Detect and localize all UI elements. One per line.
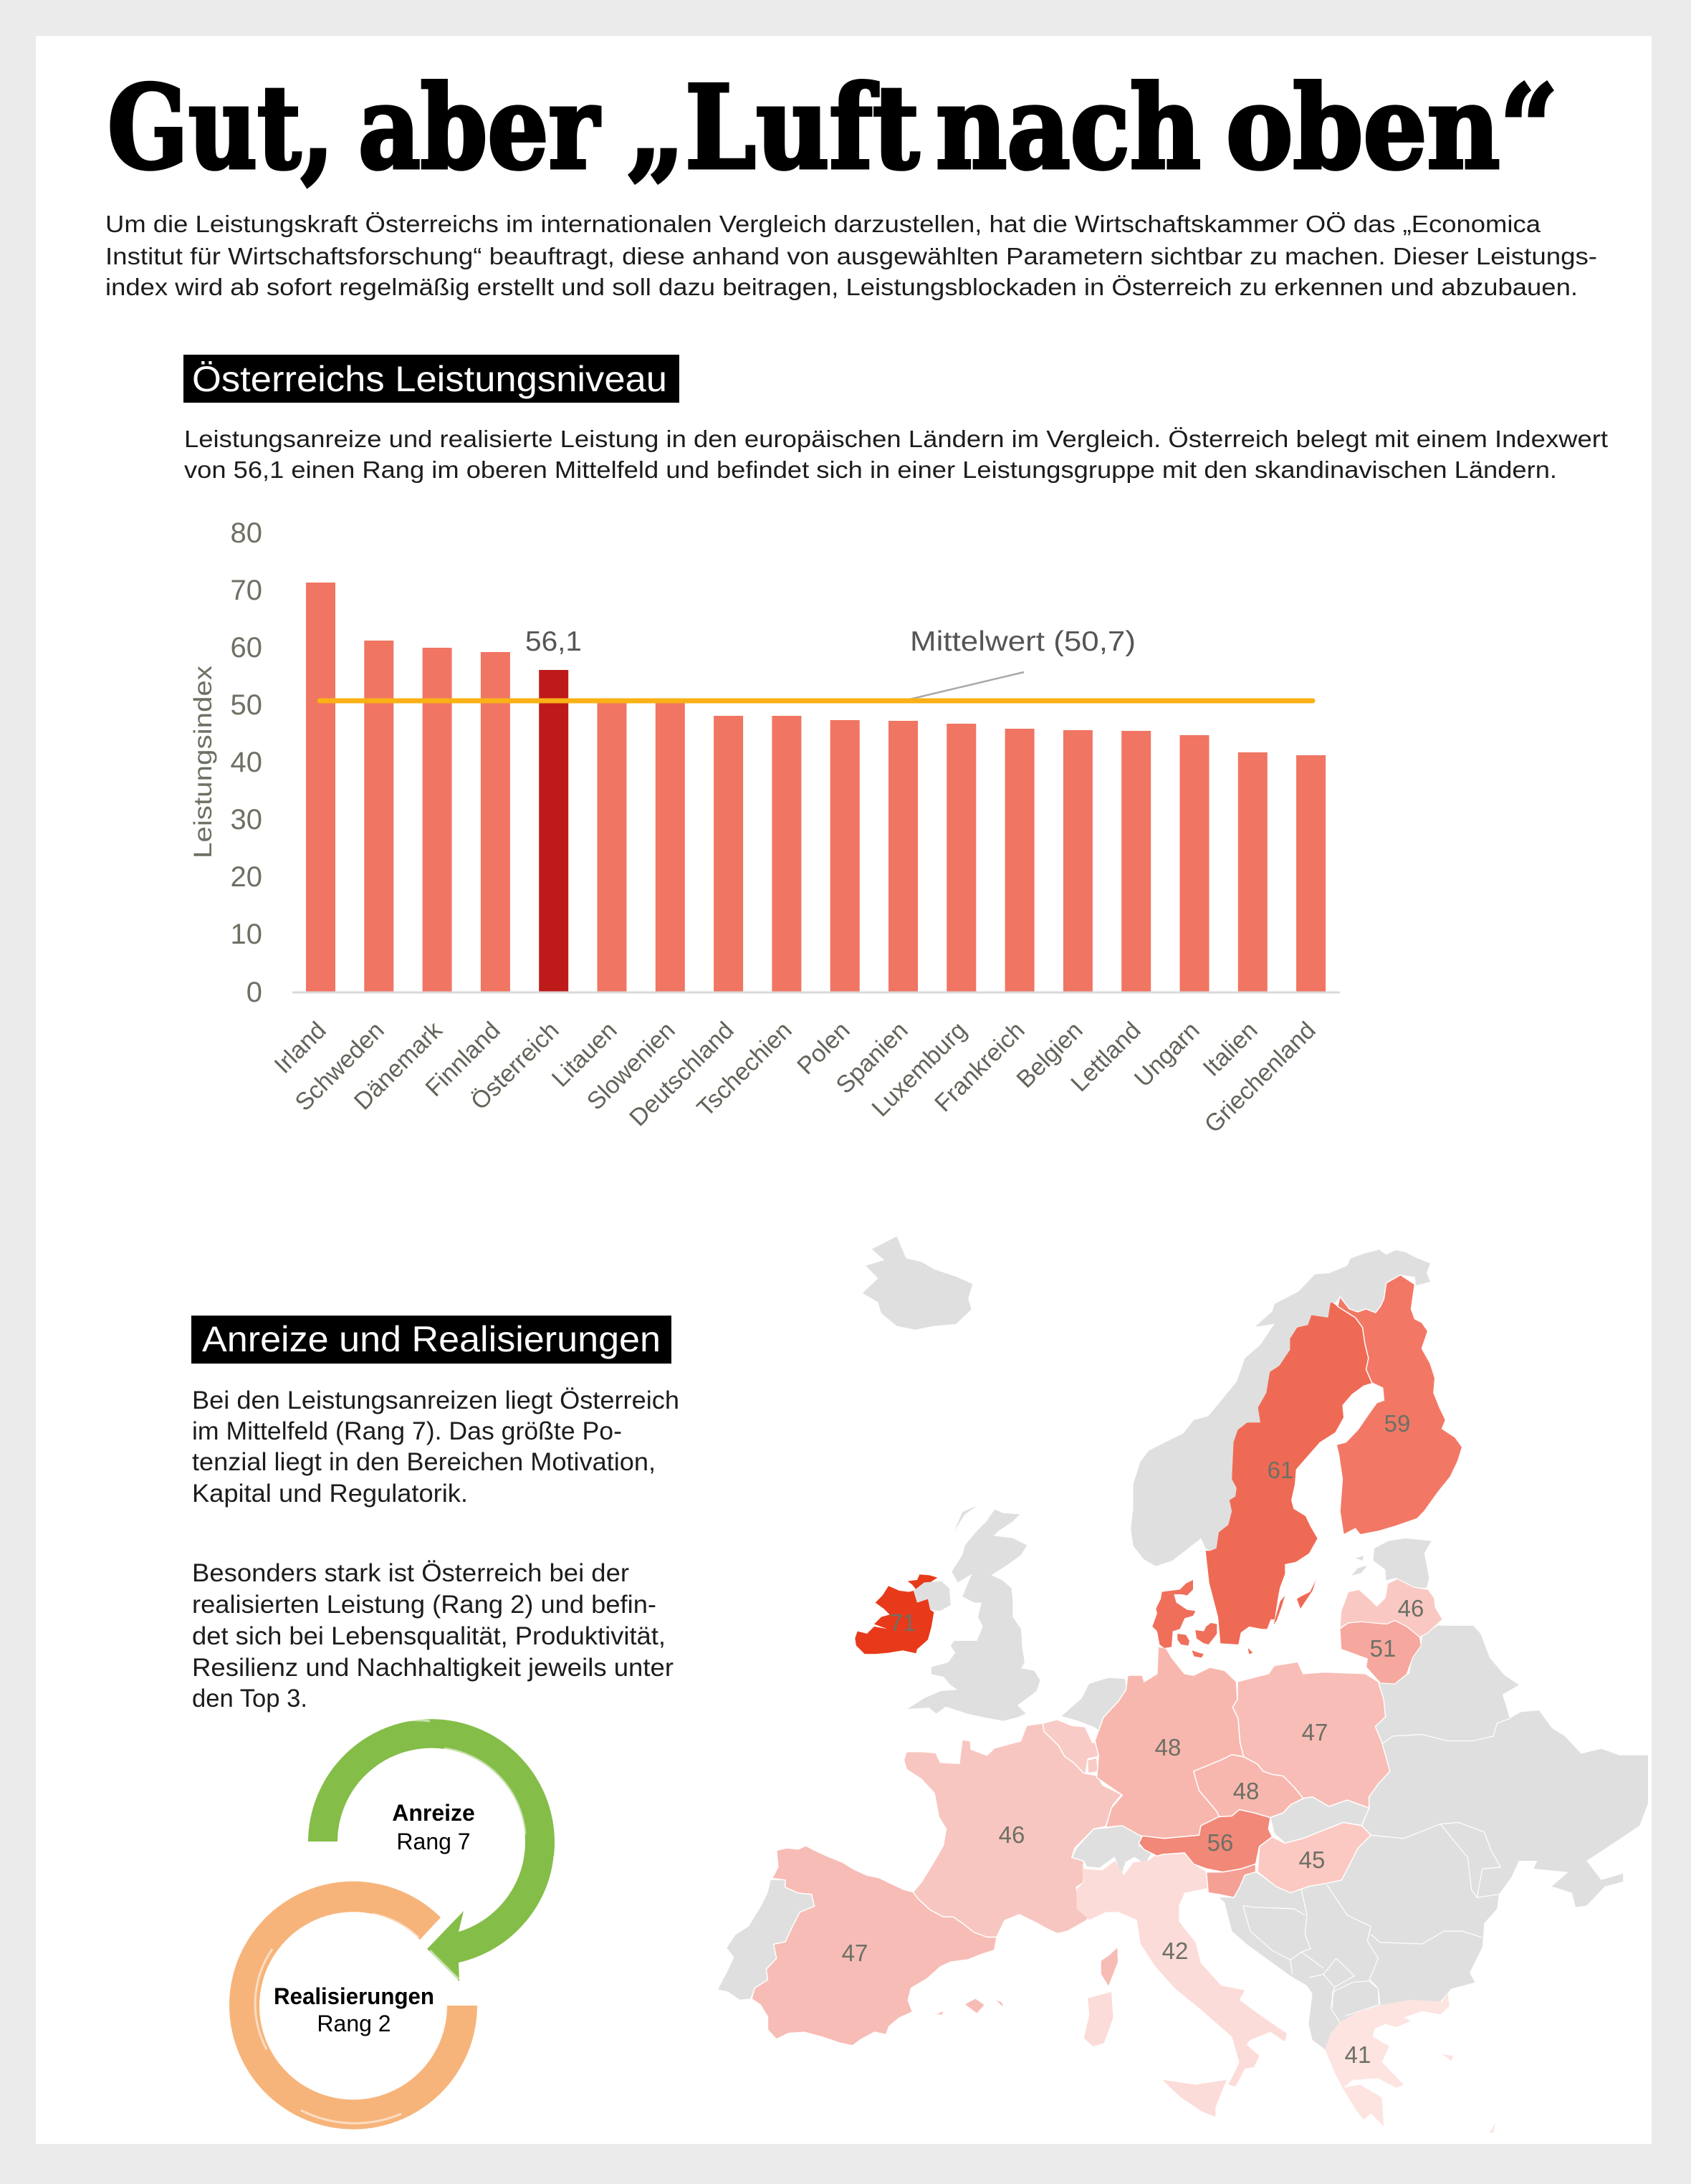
country labels: Dänemark [349,1016,448,1116]
text: realisierte Leistung: Resilienz und Nachhaltigkeit jeweils unter [192,1654,674,1682]
country labels: Frankreich [929,1017,1030,1117]
map value labels: 47 [842,1940,868,1966]
y axis tick labels: 60 [231,632,262,664]
southern Sweden [1207,1562,1316,1654]
Poland [1232,1662,1390,1808]
title: Gut, [107,60,334,195]
map value labels [842,1410,1424,2068]
Latvia [1340,1579,1442,1637]
country labels: Lettland [1065,1017,1146,1097]
Greece [1325,1993,1495,2132]
section text: Leistungsniveau: von 56,1 einen Rang im oberen Mittelfeld und befindet sich in einer Leistungsgruppe mit den skandinavischen Ländern. [184,456,1557,483]
Ireland [855,1574,937,1654]
y axis tick labels: 20 [231,861,262,893]
text: Leistungsanreize: im Mittelfeld (Rang 7). Das größte Po- [192,1417,622,1445]
map value labels: 61 [1268,1457,1293,1483]
map value labels: 45 [1299,1847,1325,1873]
Hungary [1258,1822,1371,1893]
y axis tick labels: 30 [231,804,262,835]
country labels: Spanien [831,1017,914,1099]
bars [306,583,1326,992]
label: Realisierungen: Realisierungen [274,1983,434,2009]
map value labels: 41 [1345,2041,1371,2068]
Scandinavia [1131,1250,1462,1619]
label: Anreize: Anreize [392,1800,475,1826]
France [904,1723,1121,1937]
title: oben“ [1226,60,1558,195]
mean line [320,698,1313,704]
Northern Ireland [914,1581,951,1611]
map value labels: 48 [1155,1734,1181,1761]
Slovenia [1207,1864,1256,1897]
text: Leistungsanreize: Kapital und Regulatorik. [192,1480,468,1508]
map value labels: 48 [1233,1778,1259,1804]
y axis tick labels: 0 [246,977,262,1008]
country labels: Österreich [466,1017,565,1116]
map value labels: 46 [1398,1595,1424,1622]
Norway [1131,1250,1430,1566]
y axis tick labels: 80 [231,517,262,549]
Sweden [1206,1303,1372,1619]
Czech Republic [1194,1755,1303,1818]
country labels: Luxemburg [867,1017,972,1122]
arrow: Anreize ring [308,1719,555,1981]
y axis tick labels: 50 [231,689,262,721]
British Isles and Netherlands [855,1506,1126,1732]
text: Leistungsanreize: Bei den Leistungsanreizen liegt Österreich [192,1386,679,1414]
map value labels: 56 [1207,1829,1233,1856]
label: mean value: Mittelwert (50,7) [910,626,1136,657]
country labels: Finnland [421,1017,506,1102]
country labels [269,1016,1321,1139]
map value labels: 46 [999,1821,1025,1848]
Belgium [1043,1720,1098,1773]
Austria [1139,1810,1273,1872]
country labels: Belgien [1012,1017,1088,1093]
heading: Österreichs Leistungsniveau: Österreichs Leistungsniveau [192,359,667,399]
country labels: Schweden [290,1017,390,1116]
United Kingdom [908,1506,1040,1721]
western countries [718,1720,1152,2046]
country labels: Irland [269,1017,332,1079]
country labels: Ungarn [1129,1017,1205,1093]
arrow: Realisierungen ring [229,1882,477,2130]
Iceland [863,1237,972,1330]
country labels: Slowenien [582,1017,681,1116]
y axis tick labels: 70 [231,575,262,606]
Germany [1095,1647,1244,1839]
Baltic and Danish area [1152,1562,1490,1684]
text: realisierte Leistung: den Top 3. [192,1685,307,1713]
text: realisierte Leistung: realisierten Leistung (Rang 2) und befin- [192,1591,656,1619]
Denmark [1152,1580,1217,1657]
bar chart [189,517,1340,1139]
central and eastern countries [1077,1626,1648,2132]
title [107,60,1558,195]
map value labels: 59 [1384,1410,1410,1437]
title: „Luft [627,60,919,195]
map value labels: 71 [890,1609,916,1636]
text: realisierte Leistung: Besonders stark ist Österreich bei der [192,1559,629,1587]
Finland [1336,1275,1462,1535]
Luxembourg [1088,1758,1098,1773]
y axis title: Leistungsindex [189,665,217,858]
country labels: Griechenland [1199,1017,1321,1139]
intro text: Institut für Wirtschaftsforschung“ beauftragt, diese anhand von ausgewählten Parametern sichtbar zu machen. Dieser Leistungs- [105,243,1597,269]
intro text: index wird ab sofort regelmäßig erstellt und soll dazu beitragen, Leistungsblockaden in Österreich zu erkennen und abzubauen. [105,274,1578,300]
Portugal [718,1880,815,2000]
label: Rang 7: Rang 7 [396,1829,471,1854]
Balearic Islands [936,1999,1003,2014]
country labels: Deutschland [624,1017,739,1131]
heading: Anreize und Realisierungen: Anreize und Realisierungen [202,1319,661,1359]
map value labels: 47 [1302,1719,1328,1745]
label: Austria value: 56,1 [525,626,582,657]
Belarus north [1410,1625,1490,1677]
country labels: Litauen [547,1017,623,1093]
country labels: Tschechien [692,1017,797,1122]
text: realisierte Leistung [192,1559,674,1713]
map value labels: 51 [1370,1635,1396,1662]
title: nach [936,60,1201,195]
Italy [1077,1853,1287,2087]
Lithuania [1340,1621,1421,1684]
Spain [752,1846,997,2046]
country labels: Polen [792,1017,856,1080]
label: Rang 2: Rang 2 [317,2011,391,2036]
Slovakia [1270,1797,1369,1843]
text: Leistungsanreize [192,1386,679,1508]
Netherlands [1062,1678,1126,1732]
Estonia [1352,1538,1432,1588]
section text: Leistungsniveau: Leistungsanreize und realisierte Leistung in den europäischen Ländern im Vergleich. Österreich belegt mit einem Indexwert [184,426,1608,452]
section text: Leistungsniveau [184,426,1608,483]
text: Leistungsanreize: tenzial liegt in den Bereichen Motivation, [192,1448,656,1476]
y axis tick labels [231,517,262,1008]
leader line [906,672,1024,700]
Switzerland [1072,1826,1152,1875]
eastern Europe block [1220,1626,1648,2049]
country labels: Italien [1198,1017,1263,1082]
title: aber [358,60,600,195]
y axis tick labels: 40 [231,747,262,778]
map of Europe [718,1237,1648,2132]
Sicily and Sardinia [1084,1992,1227,2117]
cycle diagram [229,1719,555,2130]
map value labels: 42 [1162,1938,1188,1964]
text: realisierte Leistung: det sich bei Lebensqualität, Produktivität, [192,1622,666,1650]
y axis tick labels: 10 [231,919,262,950]
intro text: Um die Leistungskraft Österreichs im internationalen Vergleich darzustellen, hat die Wirtschaftskammer OÖ das „Economica [105,211,1541,237]
Corsica [1101,1948,1118,1986]
intro text [105,211,1597,300]
